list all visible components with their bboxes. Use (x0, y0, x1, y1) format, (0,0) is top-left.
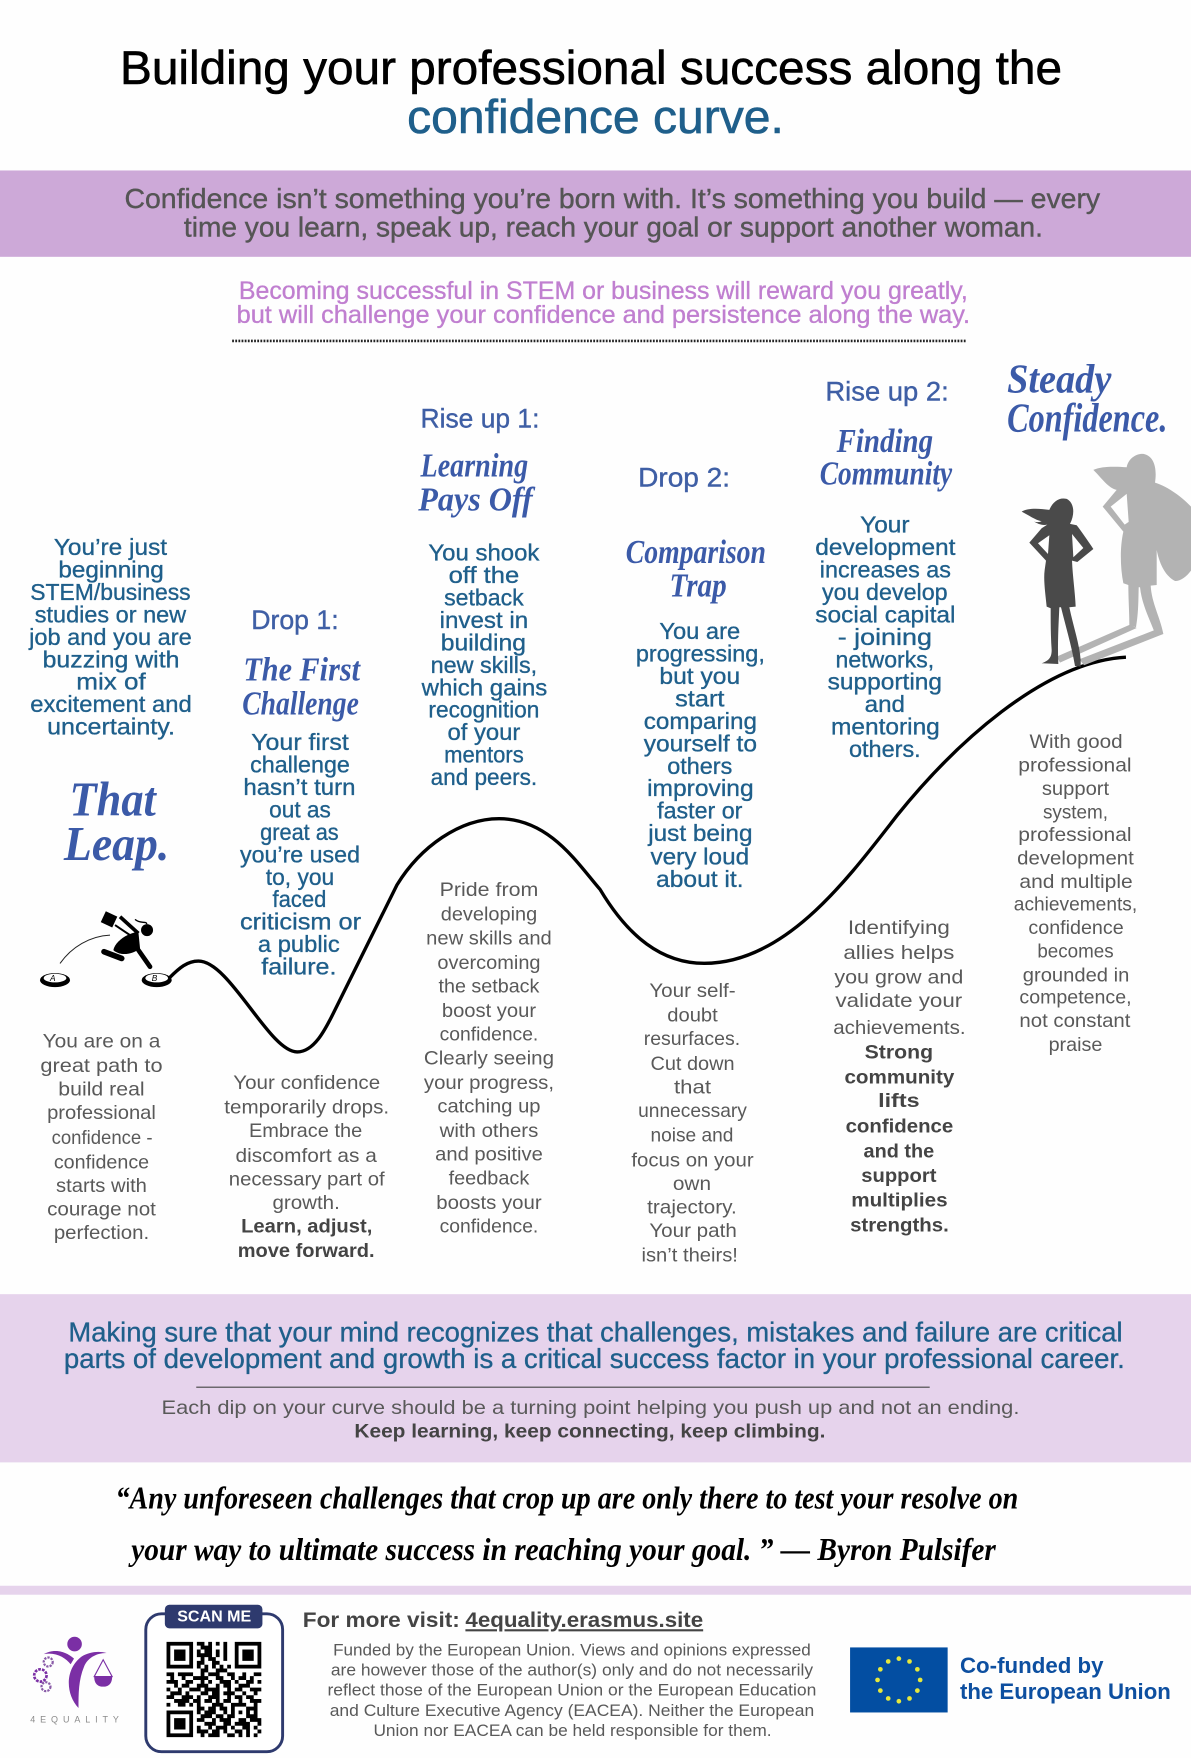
stage 3 description: and peers. (431, 764, 537, 790)
stage 4 description: but you (659, 663, 740, 689)
footer link (303, 1608, 703, 1632)
stage 3 advice: and positive (435, 1144, 543, 1166)
stage 4 advice (631, 980, 754, 1267)
stage 3 advice: your progress, (424, 1072, 554, 1094)
stage 4 advice: isn’t theirs! (641, 1245, 738, 1267)
stage 1 description (28, 534, 192, 740)
stage 4: drop 2 (626, 463, 766, 1267)
stage 5 label: Rise up 2: (825, 376, 949, 406)
stage 5 advice: confidence (846, 1116, 953, 1138)
confidence curve (169, 657, 1126, 1052)
stage 4 advice: focus on your (631, 1149, 754, 1171)
stage 3 advice: confidence. (440, 1024, 538, 1046)
stage 1 advice: build real (58, 1079, 145, 1101)
stage 1 script heading (63, 773, 169, 871)
funding disclaimer: and Culture Executive Agency (EACEA). Neither the European (330, 1702, 814, 1720)
key message heading: Making sure that your mind recognizes that challenges, mistakes and failure are critical (68, 1316, 1123, 1347)
stage 5 advice: multiplies (851, 1190, 948, 1212)
stage 2 description: great as (260, 819, 339, 845)
stage 2 description: criticism or (240, 909, 361, 935)
stage 1 script heading: Leap. (63, 818, 169, 871)
stage 3 advice: new skills and (426, 927, 552, 949)
stage 1 description: job and you are (28, 624, 192, 650)
stage 1 description: STEM/business (30, 579, 191, 605)
stage 4 advice: trajectory. (647, 1196, 737, 1218)
stage 6 advice: grounded in (1023, 964, 1129, 986)
stage 6 advice: professional (1018, 824, 1132, 846)
EU flag and co-funded label (850, 1647, 1171, 1712)
stage 1 description: You’re just (54, 534, 168, 560)
stage 2 advice: growth. (273, 1192, 340, 1214)
stage 5 description: networks, (835, 646, 934, 672)
stage 6 advice: development (1017, 848, 1134, 870)
stage 4 description: others (667, 753, 732, 779)
stage 5: rise up 2 (815, 376, 966, 1236)
stage 1 description: buzzing with (43, 646, 179, 672)
stage 6 advice: support (1042, 778, 1110, 800)
stage 5 advice: you grow and (834, 967, 963, 989)
stage 5 advice (833, 917, 966, 1236)
stage 3 description: You shook (428, 540, 540, 566)
stage 1 advice: confidence - (52, 1127, 153, 1149)
banner: confidence statement (0, 170, 1191, 257)
stage 3 advice: feedback (449, 1167, 530, 1189)
stage 5 advice: validate your (835, 990, 963, 1012)
stage 5 script heading (820, 423, 953, 492)
key message detail: Each dip on your curve should be a turning point helping you push up and not an ending. (161, 1397, 1019, 1419)
title (120, 41, 1062, 143)
stage 2 advice: necessary part of (229, 1168, 385, 1190)
co-funded label: Co-funded by (960, 1653, 1104, 1678)
stage 3 advice: developing (441, 904, 537, 926)
stage 3: rise up 1 (417, 403, 554, 1237)
stage 4 description: improving (647, 775, 754, 801)
stage 2 advice: Learn, adjust, (241, 1215, 372, 1237)
stage 2 advice: discomfort as a (236, 1145, 377, 1167)
funding disclaimer: Union nor EACEA can be held responsible for them. (373, 1722, 772, 1740)
funding disclaimer: are however those of the author(s) only and do not necessarily (331, 1661, 814, 1679)
panel: key message (0, 1294, 1191, 1462)
stage 1 description: uncertainty. (47, 714, 175, 740)
title: confidence curve. (407, 90, 784, 143)
stage 2 advice: Your confidence (233, 1072, 380, 1094)
stage 1 description: beginning (58, 557, 164, 583)
intro text (232, 277, 970, 341)
funding disclaimer: reflect those of the European Union or the European Education (327, 1682, 816, 1700)
stage 1 advice (40, 1030, 163, 1244)
stage 4 description: yourself to (644, 730, 757, 756)
stage 2 script heading: Challenge (242, 685, 359, 722)
stage 2 advice (224, 1072, 389, 1262)
icon: person leaping from A to B: A (49, 973, 56, 983)
stage 4 script heading: Trap (670, 568, 727, 605)
stage 3 advice: overcoming (437, 952, 541, 974)
stage 2 advice: Embrace the (249, 1120, 362, 1142)
stage 1 advice: confidence (54, 1152, 149, 1174)
stage 5 description: development (815, 534, 956, 560)
stage 4 description: faster or (657, 798, 743, 824)
stage 6 advice (1014, 731, 1137, 1056)
stage 5 advice: Identifying (848, 917, 950, 939)
stage 3 script heading: Pays Off (417, 481, 535, 518)
stage 6 advice: praise (1049, 1034, 1102, 1056)
intro text: Becoming successful in STEM or business will reward you greatly, (239, 277, 968, 305)
stage 6 advice: competence, (1019, 987, 1132, 1009)
funding disclaimer (327, 1641, 816, 1740)
stage 1 advice: great path to (40, 1055, 163, 1077)
stage 2 description: challenge (250, 752, 350, 778)
stage 2 description: a public (258, 931, 340, 957)
funding disclaimer: Funded by the European Union. Views and opinions expressed (333, 1641, 811, 1659)
stage 3 advice: with others (439, 1120, 539, 1142)
stage 5 description: and (865, 691, 905, 717)
stage 1 description: mix of (76, 669, 146, 695)
stage 1 script heading: That (70, 773, 157, 826)
stage 3 description: mentors (444, 742, 524, 768)
stage 5 advice: support (861, 1165, 937, 1187)
stage 2 description (240, 729, 361, 980)
stage 4 description: very loud (650, 844, 749, 870)
icon: person leaping from A to B: B (152, 973, 158, 983)
stage 6: steady confidence (1007, 356, 1191, 1056)
stage 6 advice: not constant (1019, 1010, 1131, 1032)
stage 5 description: mentoring (831, 714, 940, 740)
stage 2 description: failure. (261, 954, 336, 980)
stage 5 advice: achievements. (833, 1017, 966, 1039)
stage 5 description: supporting (828, 669, 942, 695)
stage 3 description: invest in (440, 607, 528, 633)
stage 3 advice: the setback (438, 975, 540, 997)
stage 3 description: setback (444, 585, 524, 611)
icon: person leaping from A to B (40, 911, 172, 987)
stage 4 description: comparing (644, 708, 757, 734)
stage 5 description: increases as (820, 557, 951, 583)
stage 5 advice: community (844, 1066, 954, 1088)
banner: confidence statement: time you learn, speak up, reach your goal or support another woman. (184, 212, 1043, 243)
stage 3 description: which gains (421, 674, 547, 700)
icon: woman with superhero shadow (1022, 454, 1191, 667)
stage 4 description: You are (659, 618, 740, 644)
stage 1 advice: starts with (56, 1175, 147, 1197)
stage 2 description: Your first (251, 729, 349, 755)
key message heading: parts of development and growth is a critical success factor in your professional career. (64, 1343, 1125, 1374)
stage 2 label: Drop 1: (251, 605, 339, 635)
stage 3 description (421, 540, 547, 790)
stage 3 description: building (441, 629, 526, 655)
stage 1: that leap (28, 534, 192, 1244)
stage 3 advice: boosts your (436, 1192, 542, 1214)
stage 4 description: progressing, (636, 641, 765, 667)
scan me tab (165, 1605, 262, 1628)
intro text: but will challenge your confidence and persistence along the way. (237, 301, 970, 329)
stage 5 description (815, 512, 956, 762)
footer link: For more visit: (303, 1608, 460, 1632)
quote: “Any unforeseen challenges that crop up are only there to test your resolve on (116, 1480, 1018, 1515)
stage 4 advice: that (674, 1076, 712, 1098)
icon: EU flag (850, 1647, 948, 1712)
stage 4 description: just being (647, 820, 753, 846)
stage 1 description: studies or new (35, 601, 187, 627)
stage 5 description: - joining (838, 624, 932, 650)
stage 2 advice: temporarily drops. (224, 1097, 389, 1119)
scan me tab: SCAN ME (177, 1609, 251, 1626)
stage 5 advice: and the (864, 1140, 934, 1162)
stage 2 script heading: The First (243, 652, 361, 689)
stage 5 advice: strengths. (850, 1214, 949, 1236)
stage 2 script heading (242, 652, 361, 722)
stage 5 description: you develop (822, 579, 948, 605)
stage 6 advice: professional (1018, 755, 1132, 777)
logo: 4equality (30, 1637, 119, 1725)
stage 4 script heading (626, 534, 766, 605)
stage 2 advice: move forward. (238, 1240, 375, 1262)
stage 4 description: start (675, 686, 725, 712)
stage 5 advice: Strong (865, 1042, 933, 1064)
stage 3 advice (424, 879, 554, 1237)
stage 4 advice: noise and (650, 1125, 733, 1147)
stage 1 advice: courage not (47, 1199, 156, 1221)
stage 4 label: Drop 2: (638, 463, 730, 493)
stage 5 script heading: Finding (836, 423, 933, 460)
stage 3 advice: Clearly seeing (424, 1047, 554, 1069)
quote (116, 1480, 1018, 1567)
stage 4 script heading: Comparison (626, 534, 766, 571)
co-funded label: the European Union (960, 1679, 1171, 1704)
stage 4 advice: Your self- (649, 980, 736, 1002)
stage 3 script heading: Learning (420, 448, 528, 485)
stage 6 advice: With good (1030, 731, 1123, 753)
stage 1 description: excitement and (30, 691, 192, 717)
stage 3 description: of your (447, 719, 521, 745)
footer link: 4equality.erasmus.site (465, 1608, 703, 1632)
stage 4 advice: Your path (649, 1220, 737, 1242)
quote: your way to ultimate success in reaching your goal. ” — Byron Pulsifer (127, 1532, 997, 1567)
stage 3 advice: Pride from (440, 879, 538, 901)
stage 1 advice: professional (47, 1102, 156, 1124)
stage 3 description: new skills, (431, 652, 537, 678)
stage 2 description: faced (273, 886, 326, 912)
co-funded label (960, 1653, 1171, 1704)
stage 5 description: others. (849, 736, 921, 762)
stage 1 advice: You are on a (43, 1030, 160, 1052)
logo: 4equality: 4EQUALITY (30, 1715, 119, 1725)
stage 5 advice: allies helps (843, 942, 955, 964)
stage 6 advice: confidence (1028, 917, 1124, 939)
stage 6 advice: achievements, (1014, 894, 1137, 916)
stage 3 advice: catching up (437, 1095, 541, 1117)
stage 2 description: hasn’t turn (243, 774, 356, 800)
stage 4 description: about it. (656, 866, 744, 892)
stage 5 script heading: Community (820, 455, 953, 492)
QR code card (146, 1605, 283, 1752)
stage 6 advice: and multiple (1019, 871, 1133, 893)
title: Building your professional success along the (120, 41, 1062, 94)
key message heading (64, 1316, 1125, 1374)
stage 6 script heading: Steady (1007, 356, 1112, 402)
stage 5 description: social capital (815, 601, 955, 627)
stage 4 advice: resurfaces. (644, 1028, 740, 1050)
stage 4 description (636, 618, 765, 892)
stage 2 description: to, you (266, 864, 334, 890)
stage 4 advice: doubt (667, 1005, 718, 1027)
stage 2 description: out as (269, 797, 331, 823)
stage 2: drop 1 (224, 605, 389, 1262)
stage 1 advice: perfection. (54, 1222, 149, 1244)
stage 3 script heading (417, 448, 535, 518)
stage 6 advice: becomes (1037, 941, 1114, 963)
key message detail (161, 1397, 1019, 1443)
stage 5 description: Your (860, 512, 910, 538)
key message detail: Keep learning, keep connecting, keep climbing. (354, 1421, 825, 1443)
stage 6 script heading (1007, 356, 1167, 441)
stage 6 advice: system, (1043, 802, 1108, 824)
stage 2 description: you’re used (240, 841, 360, 867)
stage 4 advice: own (673, 1173, 711, 1195)
stage 3 advice: confidence. (440, 1215, 538, 1237)
banner: confidence statement: Confidence isn’t something you’re born with. It’s something you build — every (124, 183, 1100, 214)
stage 5 advice: lifts (878, 1090, 920, 1112)
stage 3 label: Rise up 1: (421, 403, 539, 433)
stage 3 description: recognition (428, 697, 539, 723)
stage 4 advice: unnecessary (638, 1100, 747, 1122)
QR code (167, 1644, 261, 1735)
stage 3 advice: boost your (442, 1000, 537, 1022)
stage 4 advice: Cut down (650, 1053, 735, 1075)
stage 3 description: off the (449, 562, 519, 588)
